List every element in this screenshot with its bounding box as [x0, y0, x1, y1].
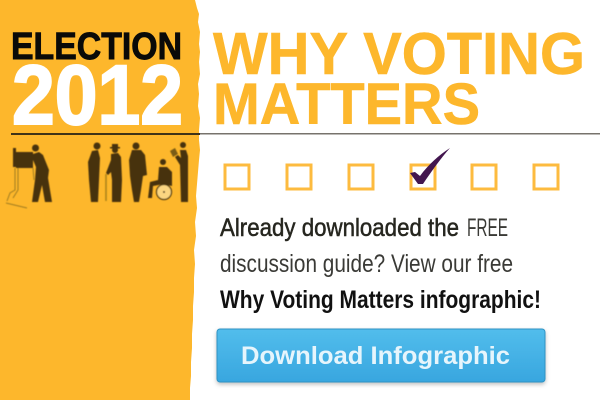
- button: download infographic: [217, 329, 545, 382]
- checkbox row: [225, 165, 558, 189]
- icon: purple check mark: [410, 148, 450, 184]
- text block: intro copy: Why Voting Matters infographic!: [220, 286, 541, 314]
- panel: torn yellow band: [0, 0, 200, 400]
- figure: person in wheelchair: [148, 159, 172, 200]
- text block: intro copy: [220, 214, 541, 314]
- title: MATTERS: MATTERS: [213, 72, 480, 137]
- button: download infographic: Download Infographic: [241, 342, 510, 370]
- figure: standing man: [88, 142, 100, 202]
- text block: intro copy: discussion guide? View our free: [220, 250, 513, 278]
- heading: 2012: 2012: [12, 48, 183, 142]
- text block: intro copy: FREE: [467, 214, 508, 242]
- icon: voter at booth: [6, 144, 52, 208]
- icon: group of citizens: [88, 142, 188, 202]
- figure: person reading: [170, 142, 188, 202]
- title: WHY VOTING: WHY VOTING: [213, 21, 585, 87]
- figure: elder with cane: [106, 144, 122, 202]
- figure: woman in coat: [129, 142, 147, 202]
- divider rule: [11, 133, 600, 135]
- text block: intro copy: Already downloaded the: [220, 214, 459, 242]
- heading: ELECTION: ELECTION: [11, 26, 182, 68]
